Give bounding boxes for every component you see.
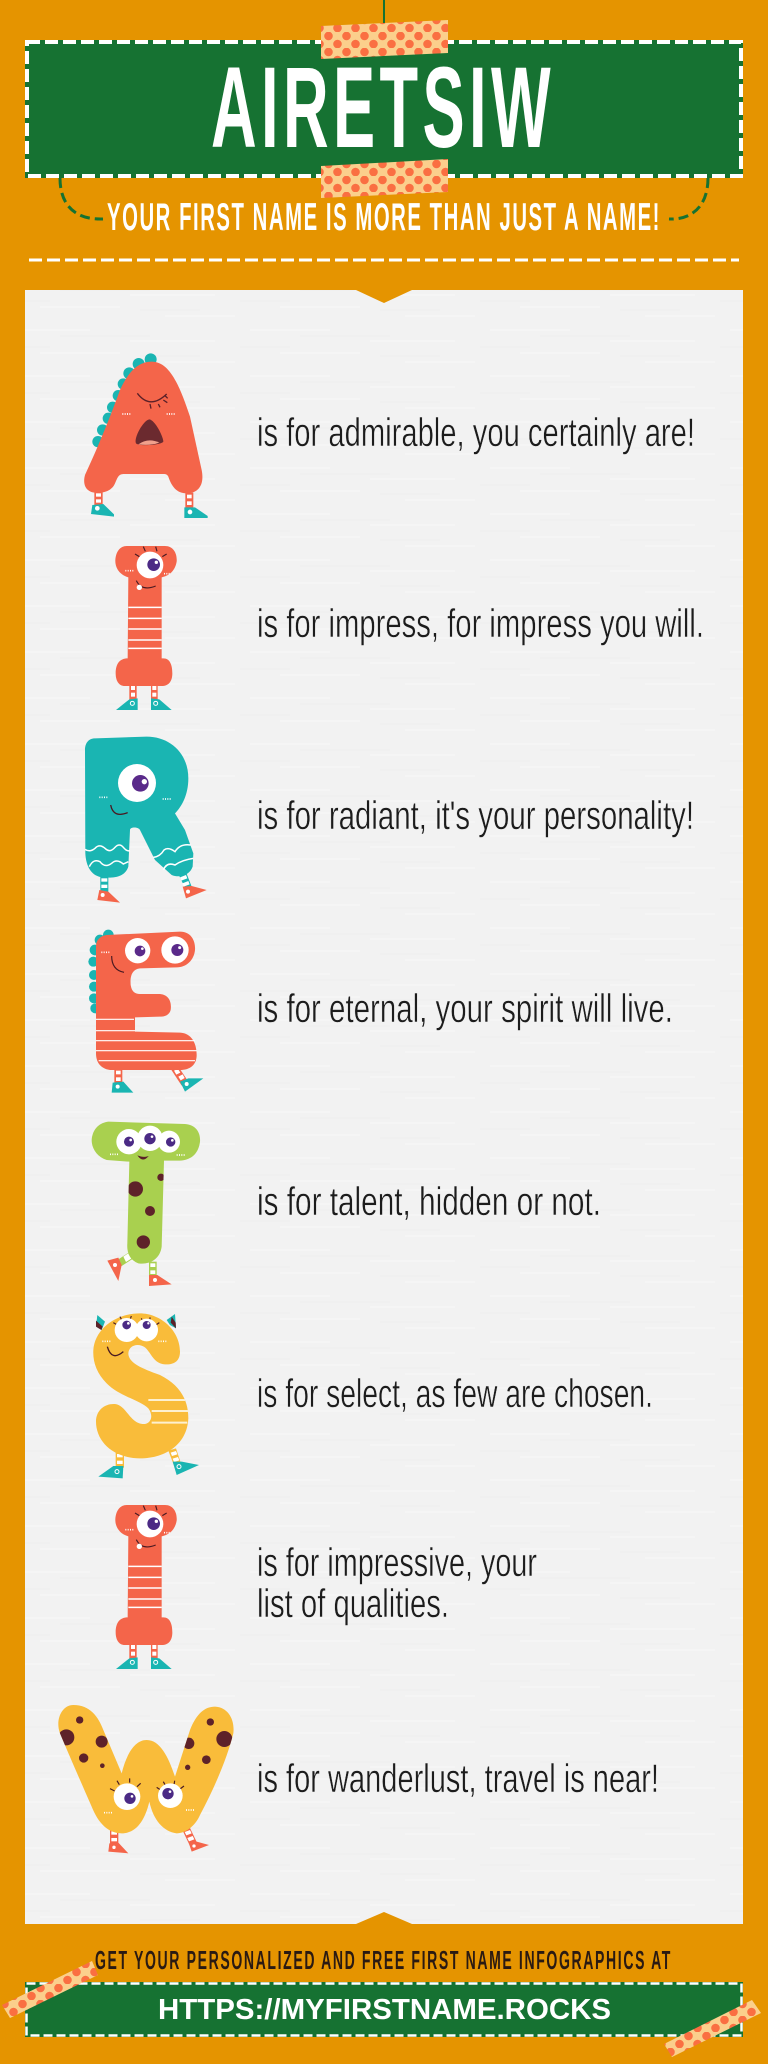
- letter R monster: [85, 737, 207, 903]
- text: I second: list of qualities.: [257, 1582, 449, 1626]
- tape: under title: [321, 159, 448, 198]
- letter A monster: [84, 353, 208, 518]
- letter S monster: [93, 1313, 199, 1478]
- bracket: left: [60, 178, 103, 219]
- url: HTTPS://MYFIRSTNAME.ROCKS: [158, 1994, 611, 2026]
- tape: bottom left: [2, 1961, 98, 2018]
- tape: top: [321, 20, 448, 59]
- tape: bottom right: [664, 2000, 761, 2057]
- letter T monster: [92, 1122, 200, 1286]
- text: I second: is for impressive, your: [257, 1541, 537, 1585]
- letter I monster, second: [115, 1505, 177, 1669]
- title banner: [25, 40, 743, 178]
- text: T: is for talent, hidden or not.: [257, 1180, 601, 1224]
- letter W monster: [58, 1705, 234, 1853]
- letter I monster: [115, 546, 177, 710]
- letter E monster: [88, 930, 203, 1093]
- panel: letters: [25, 290, 743, 1924]
- footer banner: [25, 1982, 743, 2037]
- text: I second: [257, 1541, 537, 1626]
- hanging string: [383, 0, 385, 24]
- bracket: right: [669, 178, 708, 219]
